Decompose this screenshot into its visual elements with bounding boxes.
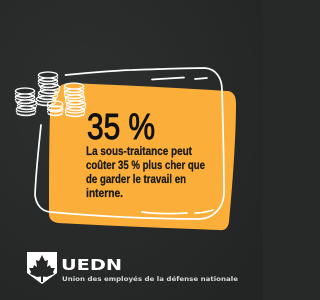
panel: orange card [49,83,236,230]
left coin stack [16,88,36,116]
text block: statement: La sous-traitance peut [86,146,192,158]
text block: statement [86,146,205,200]
middle coin stack [36,72,60,106]
icon: shield with maple leaf [27,252,57,284]
wordmark: UEDN [61,256,122,274]
low coin stack [48,101,63,116]
text block: statement: de garder le travail en [86,174,186,186]
hand-drawn white frame [35,68,224,219]
logo: UEDN [27,252,238,284]
icon: stacks of coins [16,72,86,117]
right coin stack [64,83,86,117]
subtitle: Union des employés de la défense nationale [62,275,238,283]
text block: statement: coûter 35 % plus cher que [86,160,205,172]
heading: 35 %: 35 % [87,106,155,147]
text block: statement: interne. [86,188,123,200]
